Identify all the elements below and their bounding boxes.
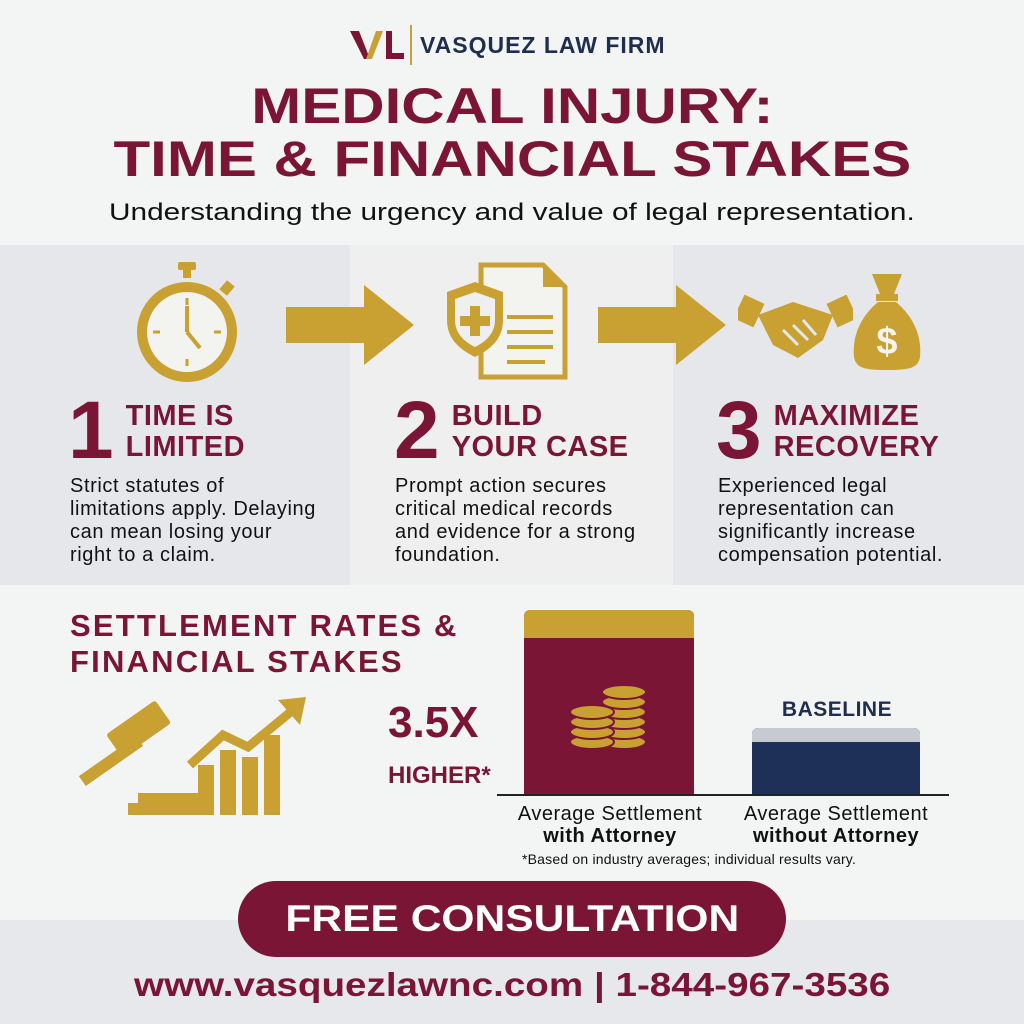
step 2 text: Prompt action secures [395, 475, 607, 497]
step 1 heading: 1 [68, 385, 114, 476]
step 3 text: compensation potential. [718, 544, 943, 566]
CTA button [238, 881, 786, 957]
icon: handshake [738, 294, 853, 358]
step 2 text: critical medical records [395, 498, 613, 520]
step 1 heading: LIMITED [126, 431, 245, 463]
text: without Attorney [753, 825, 919, 847]
step 3 text: Experienced legal [718, 475, 887, 497]
step 1 text [70, 475, 316, 566]
text: Average Settlement [744, 803, 928, 825]
contact line: www.vasquezlawnc.com | 1-844-967-3536 [134, 966, 890, 1003]
arrow 1 [286, 285, 414, 365]
panel: steps [0, 245, 1024, 585]
CTA button: FREE CONSULTATION [285, 898, 739, 939]
footer band [0, 920, 1024, 1024]
title: MEDICAL INJURY: [251, 78, 773, 134]
logo header [350, 25, 666, 65]
icon: gavel and growth chart [78, 697, 306, 815]
step 3 heading: 3 [716, 385, 762, 476]
step 1 heading [68, 385, 245, 476]
icon: stopwatch [137, 262, 237, 382]
icon: money bag [854, 274, 920, 370]
bar labels [518, 803, 702, 847]
step 3 text: significantly increase [718, 521, 916, 543]
callout: 3.5X higher: HIGHER* [388, 762, 491, 789]
callout: 3.5X higher: 3.5X [388, 698, 479, 747]
logo header: VASQUEZ LAW FIRM [420, 32, 666, 58]
label: baseline: BASELINE [782, 698, 892, 721]
bar: without attorney [752, 728, 920, 794]
bar labels: with Attorney [543, 825, 677, 847]
step 1 text: right to a claim. [70, 544, 216, 566]
step 2 heading [394, 385, 629, 476]
step 1 heading: TIME IS [126, 400, 234, 432]
step 3 heading [716, 385, 939, 476]
footnote: *Based on industry averages; individual results vary. [522, 851, 856, 867]
step 3 text [718, 475, 943, 566]
step 3 heading: MAXIMIZE [774, 400, 919, 432]
icon: money bag: $ [876, 321, 898, 363]
step 2 text: and evidence for a strong [395, 521, 636, 543]
step 3 heading: RECOVERY [774, 431, 939, 463]
step 2 text: foundation. [395, 544, 501, 566]
step 2 heading: 2 [394, 385, 440, 476]
title [113, 78, 911, 187]
subtitle: Understanding the urgency and value of legal representation. [109, 199, 915, 226]
title: TIME & FINANCIAL STAKES [113, 131, 911, 187]
bar labels: Average Settlement [518, 803, 702, 825]
bar: with attorney [524, 610, 694, 794]
settlement heading [70, 608, 459, 679]
icon: medical document [447, 262, 568, 380]
step 2 heading: BUILD [452, 400, 543, 432]
step 2 heading: YOUR CASE [452, 431, 629, 463]
step 1 text: can mean losing your [70, 521, 272, 543]
bar chart [497, 610, 949, 796]
arrow 2 [598, 285, 726, 365]
settlement heading: FINANCIAL STAKES [70, 644, 404, 679]
icon: VL monogram [350, 31, 404, 59]
callout: 3.5X higher [388, 698, 491, 789]
step 1 text: limitations apply. Delaying [70, 498, 316, 520]
step 2 text [395, 475, 636, 566]
step 3 text: representation can [718, 498, 894, 520]
step 1 text: Strict statutes of [70, 475, 224, 497]
icon: coins [571, 686, 645, 748]
settlement heading: SETTLEMENT RATES & [70, 608, 459, 643]
